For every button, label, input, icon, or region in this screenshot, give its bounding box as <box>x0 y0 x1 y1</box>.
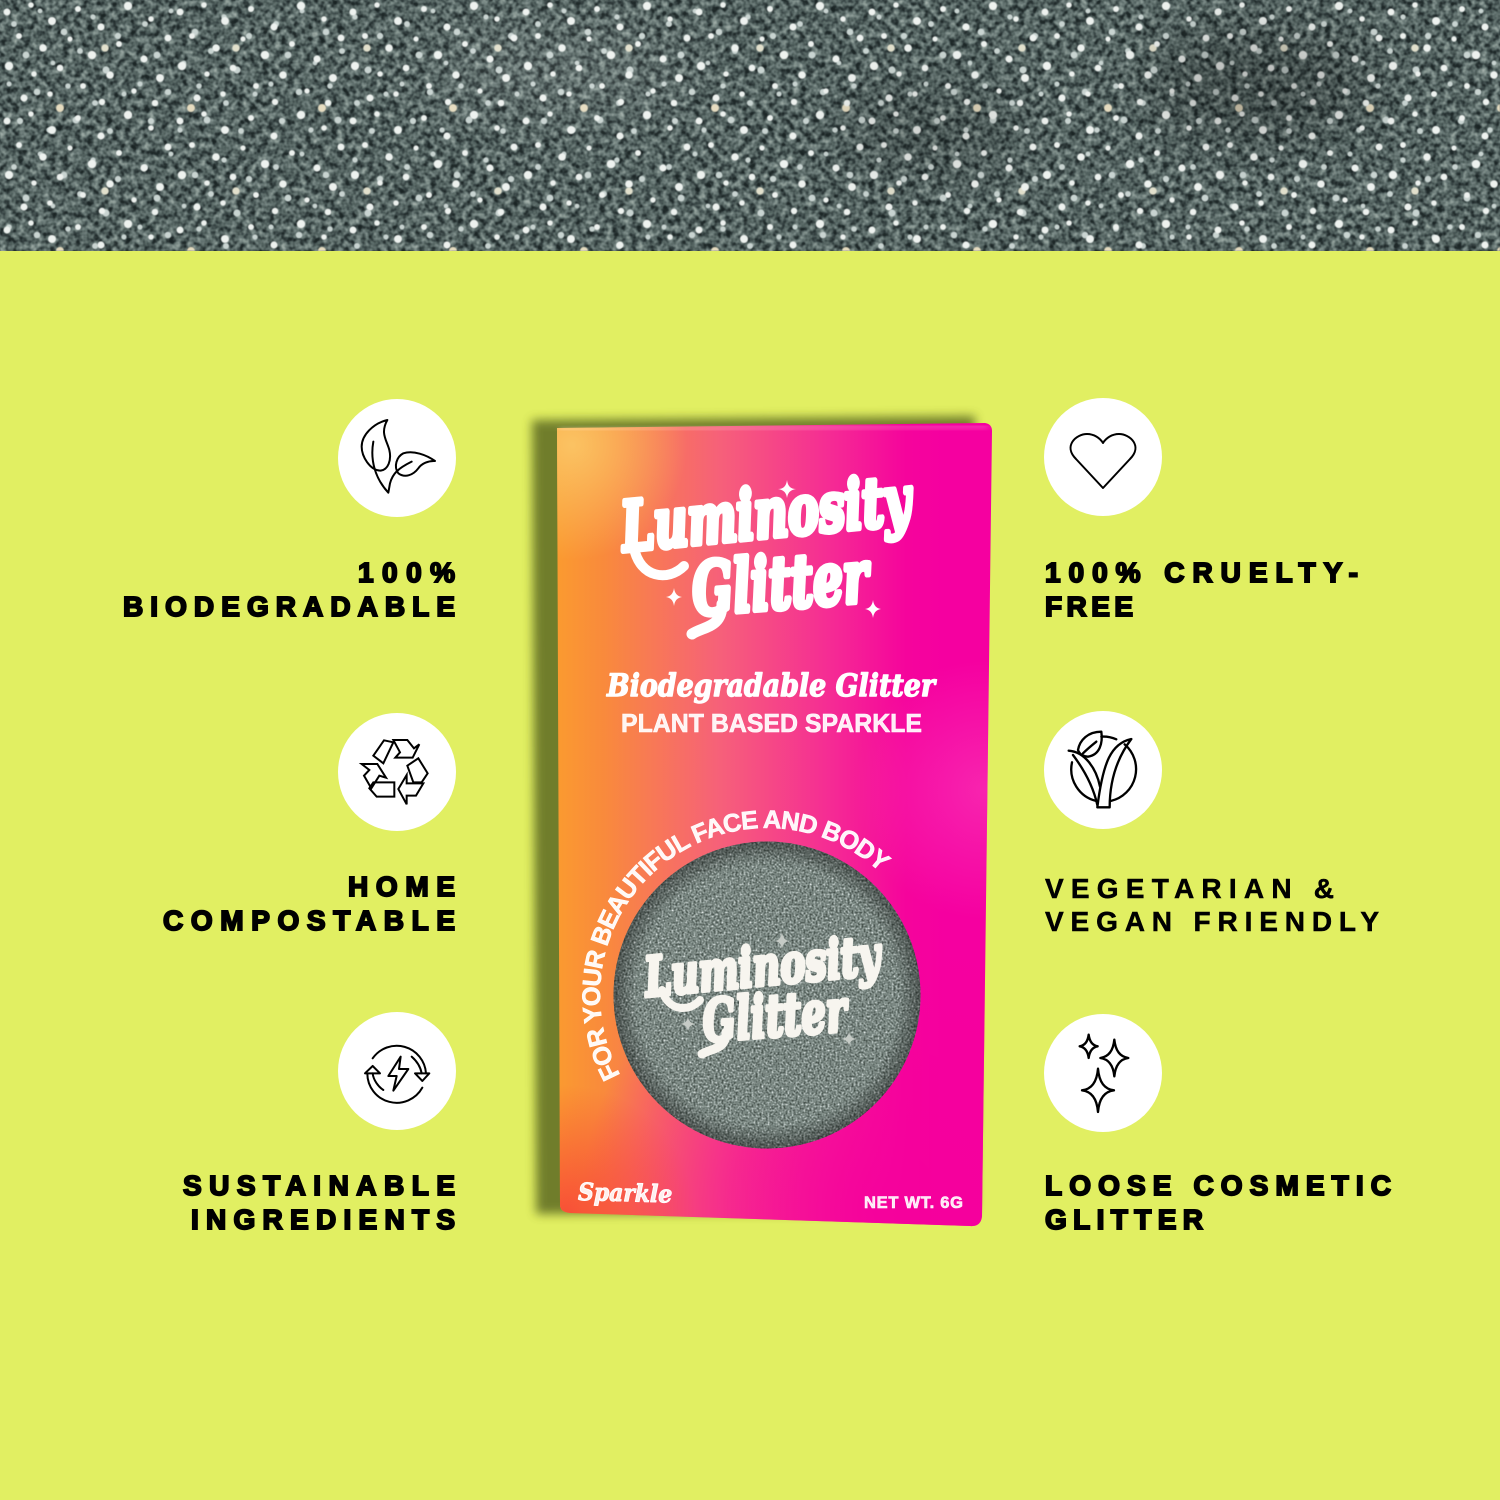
icon: leaves <box>338 399 456 517</box>
icon: renewable energy <box>338 1012 456 1130</box>
label: sustainable ingredients <box>183 1170 455 1235</box>
label: home compostable <box>163 871 455 936</box>
window logo <box>640 923 885 1056</box>
product box <box>525 409 992 1226</box>
label: 100% biodegradable <box>123 557 455 622</box>
label: sustainable ingredients: SUSTAINABLE <box>183 1170 455 1201</box>
label: 100% biodegradable: BIODEGRADABLE <box>123 591 455 622</box>
feature: loose cosmetic glitter <box>1044 1014 1391 1235</box>
label: vegetarian and vegan friendly <box>1045 873 1379 937</box>
feature: vegetarian and vegan friendly <box>1044 711 1379 937</box>
net weight: NET WT. 6G <box>864 1194 963 1212</box>
feature: home compostable <box>163 713 456 936</box>
label: 100% cruelty-free: 100% CRUELTY- <box>1045 557 1358 588</box>
label: vegetarian and vegan friendly: VEGAN FRIENDLY <box>1045 906 1379 937</box>
feature: sustainable ingredients <box>183 1012 456 1235</box>
label: home compostable: HOME <box>348 871 455 902</box>
label: loose cosmetic glitter: LOOSE COSMETIC <box>1045 1170 1391 1201</box>
brand logo <box>616 460 917 634</box>
icon: vegan leaf <box>1044 711 1162 829</box>
icon: sparkles <box>1044 1014 1162 1132</box>
subtitle: plant based sparkle: PLANT BASED SPARKLE <box>621 708 922 738</box>
brand logo: Glitter <box>689 533 874 632</box>
box shadow <box>532 416 975 1214</box>
brand logo: Luminosity <box>616 460 917 568</box>
box shading <box>557 423 992 1226</box>
icon: heart <box>1044 398 1162 516</box>
glitter texture band <box>0 0 1500 251</box>
glitter window <box>610 838 925 1153</box>
label: loose cosmetic glitter: GLITTER <box>1045 1204 1203 1235</box>
icon: recycle <box>338 713 456 831</box>
feature: 100% cruelty-free <box>1044 398 1358 622</box>
curved text: FOR YOUR BEAUTIFUL FACE AND BODY <box>582 810 892 1082</box>
label: home compostable: COMPOSTABLE <box>163 905 455 936</box>
label: vegetarian and vegan friendly: VEGETARIAN & <box>1045 873 1334 904</box>
window logo: Luminosity <box>640 923 885 1009</box>
label: 100% biodegradable: 100% <box>358 557 455 588</box>
shade name: sparkle: Sparkle <box>578 1177 673 1208</box>
label: 100% cruelty-free <box>1045 557 1358 622</box>
label: sustainable ingredients: INGREDIENTS <box>191 1204 455 1235</box>
label: 100% cruelty-free: FREE <box>1045 591 1133 622</box>
subtitle: biodegradable glitter: Biodegradable Glitter <box>606 668 937 704</box>
feature: 100% biodegradable <box>123 399 456 622</box>
label: loose cosmetic glitter <box>1045 1170 1391 1235</box>
box face <box>557 423 992 1226</box>
window logo: Glitter <box>700 976 852 1056</box>
